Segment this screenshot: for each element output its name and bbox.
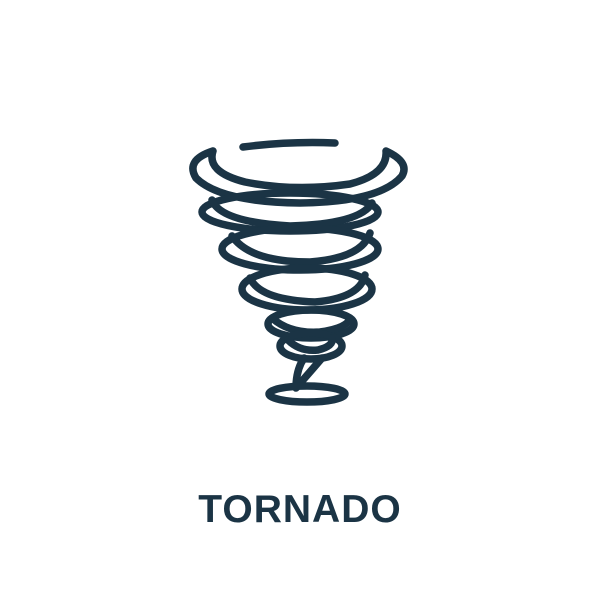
top bowl	[193, 151, 404, 203]
ring 4	[268, 310, 354, 338]
top line	[243, 142, 335, 147]
title: TORNADO	[198, 488, 402, 531]
ring 5	[280, 333, 342, 359]
base ellipse	[269, 386, 345, 402]
ring 1	[202, 193, 378, 231]
ring 3	[242, 268, 372, 310]
stem	[296, 358, 322, 388]
ring 2	[222, 228, 378, 270]
